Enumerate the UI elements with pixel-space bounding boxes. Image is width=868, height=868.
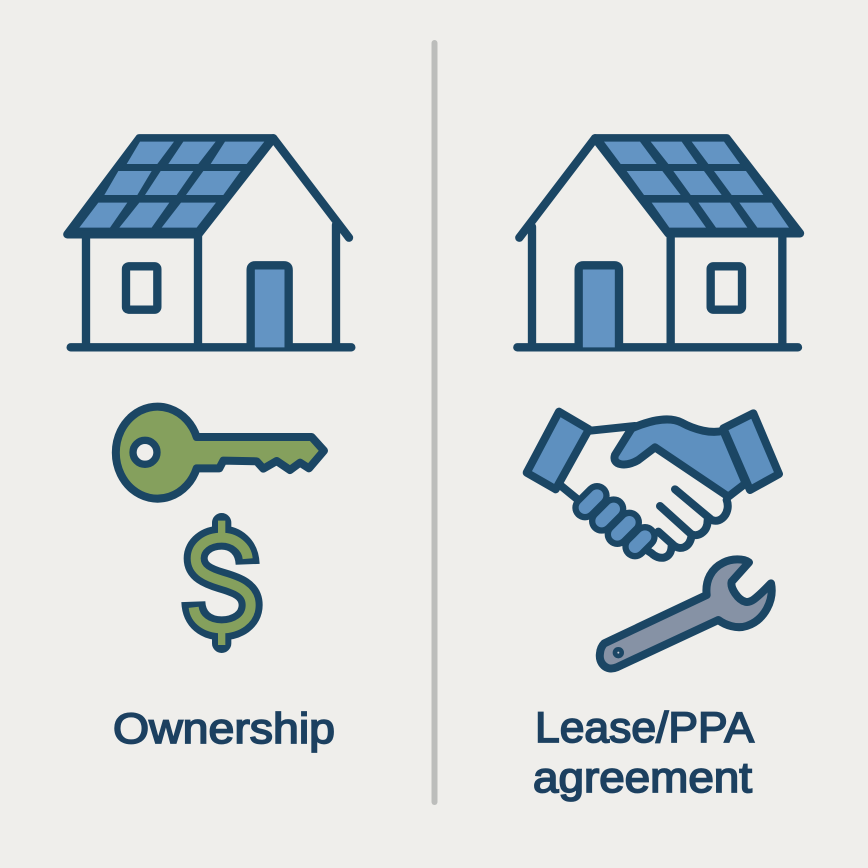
white hand: [560, 426, 729, 558]
icon: key: [116, 407, 324, 499]
fingers: [585, 496, 645, 547]
heading: Lease/PPA agreement: [533, 704, 754, 802]
right house walls: [517, 138, 798, 347]
divider: [432, 40, 438, 805]
heading: Ownership: Ownership: [113, 705, 335, 753]
left house roof panels: [67, 138, 273, 234]
left house door: [251, 265, 289, 347]
heading: Lease/PPA agreement: Lease/PPA: [535, 704, 754, 752]
right house roof panels: [595, 138, 800, 233]
icon: dollar sign: [193, 521, 251, 645]
left house walls: [71, 138, 351, 347]
right cuff: [723, 413, 779, 490]
icon: wrench: [600, 559, 772, 669]
left cuff: [527, 412, 589, 489]
right house window: [711, 266, 742, 310]
icon: right house with solar roof: [517, 138, 800, 347]
icon: handshake: [527, 412, 779, 558]
left house window: [126, 266, 157, 310]
icon: left house with solar roof: [67, 138, 351, 347]
heading: Lease/PPA agreement: agreement: [533, 754, 752, 802]
right house door: [579, 265, 619, 347]
finger lines: [646, 489, 728, 558]
blue hand: [614, 419, 746, 497]
